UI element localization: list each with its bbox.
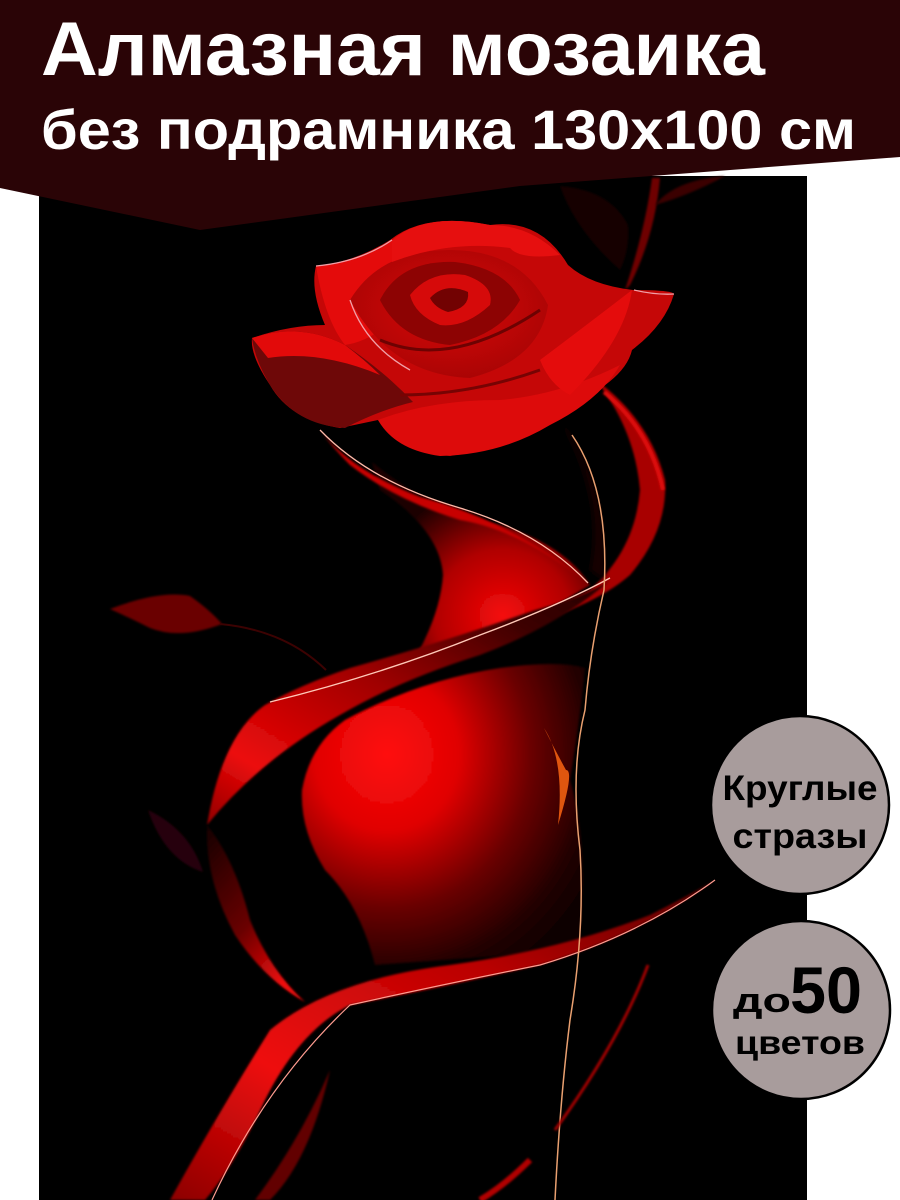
illustration: lower ribbon [170,880,715,1200]
badge: round rhinestones: стразы [732,817,868,856]
subtitle: без подрамника 130х100 см [41,98,856,161]
badge: up to 50 colours: до [733,982,791,1020]
badge: round rhinestones [711,716,889,894]
badge: up to 50 colours: цветов [735,1024,865,1061]
illustration: left thigh band [207,825,305,1002]
illustration: hip [302,664,585,965]
title: Алмазная мозаика [41,7,766,92]
badge: round rhinestones: Круглые [722,769,878,808]
illustration: rose [252,221,674,456]
badge: up to 50 colours: 50 [790,953,862,1027]
illustration: body waist [372,462,590,675]
banner [0,0,900,230]
badge: up to 50 colours [712,921,890,1099]
illustration: hip ribbon [207,578,610,825]
illustration: stem and upper leaves [560,176,725,290]
illustration: body contour line [480,435,648,1200]
illustration: left leaf [110,595,326,872]
panel: product photo [39,176,807,1200]
illustration: upper ribbon [320,380,665,632]
